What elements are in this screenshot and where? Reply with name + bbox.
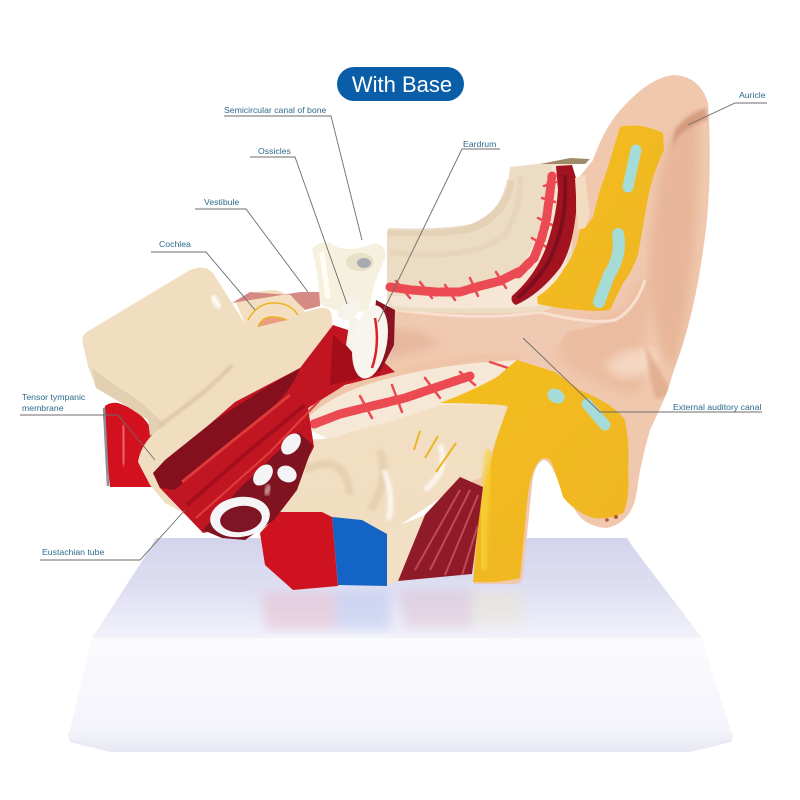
- cyan spots lower: [545, 385, 567, 407]
- bottom red artery: [260, 512, 338, 590]
- label: Eustachian tube: Eustachian tube: [42, 547, 104, 557]
- nerve and vessel bundle: [203, 430, 313, 540]
- label: Ossicles: Ossicles: [258, 146, 291, 156]
- beige between blue and muscle: [387, 515, 425, 585]
- white display base: [68, 538, 733, 752]
- label: Cochlea: [151, 239, 255, 310]
- label: External auditory canal: External auditory canal: [673, 402, 761, 412]
- upper bone: [387, 158, 590, 313]
- auricle skin: [385, 75, 710, 584]
- label: Vestibule: [195, 197, 308, 292]
- base front face: [68, 638, 733, 752]
- ossicles: [337, 297, 361, 352]
- lobe pores: [605, 518, 609, 522]
- label: Tensor tympanic membrane: membrane: [22, 403, 64, 413]
- label: Auricle: Auricle: [739, 90, 766, 100]
- base top surface: [92, 538, 702, 638]
- label: Semicircular canal of bone: [224, 105, 362, 240]
- lower beige mass: [262, 404, 508, 583]
- label: External auditory canal: [523, 338, 762, 412]
- anatomical ear model infographic: [20, 67, 767, 752]
- left red vessel: [103, 403, 152, 487]
- title pill: With Base: [352, 72, 452, 97]
- blue vein: [332, 517, 387, 586]
- red tissue and tensor muscle: [153, 325, 395, 533]
- label: Tensor tympanic membrane: [20, 392, 155, 460]
- concha shading: [650, 115, 698, 372]
- label: Auricle: [688, 90, 767, 125]
- label: Ossicles: [250, 146, 347, 304]
- label: Tensor tympanic membrane: Tensor tympanic: [22, 392, 86, 402]
- label: Semicircular canal of bone: Semicircular canal of bone: [224, 105, 327, 115]
- base reflection: [262, 590, 522, 630]
- lower dark muscle: [398, 477, 483, 581]
- label: Eardrum: Eardrum: [463, 139, 496, 149]
- small yellow streaks: [414, 431, 456, 472]
- eardrum: [347, 300, 395, 381]
- upper yellow cartilage: [537, 125, 664, 311]
- label: Vestibule: Vestibule: [204, 197, 239, 207]
- lower bone with marrow: [300, 353, 525, 440]
- left bone block: [82, 268, 333, 512]
- dark red band: [512, 165, 576, 305]
- title pill: [337, 67, 464, 101]
- lower yellow cartilage: [440, 360, 629, 582]
- cyan cartilage spots: [628, 150, 636, 187]
- red bone marrow upper: [390, 176, 556, 300]
- label: Eardrum: [378, 139, 500, 322]
- eustachian tube ring: [208, 493, 272, 541]
- label: Eustachian tube: [40, 510, 185, 560]
- label: Cochlea: Cochlea: [159, 239, 191, 249]
- ear model: [82, 75, 710, 590]
- semicircular canal of bone: [312, 243, 385, 312]
- cochlea: [232, 290, 320, 328]
- canal shading: [385, 313, 618, 368]
